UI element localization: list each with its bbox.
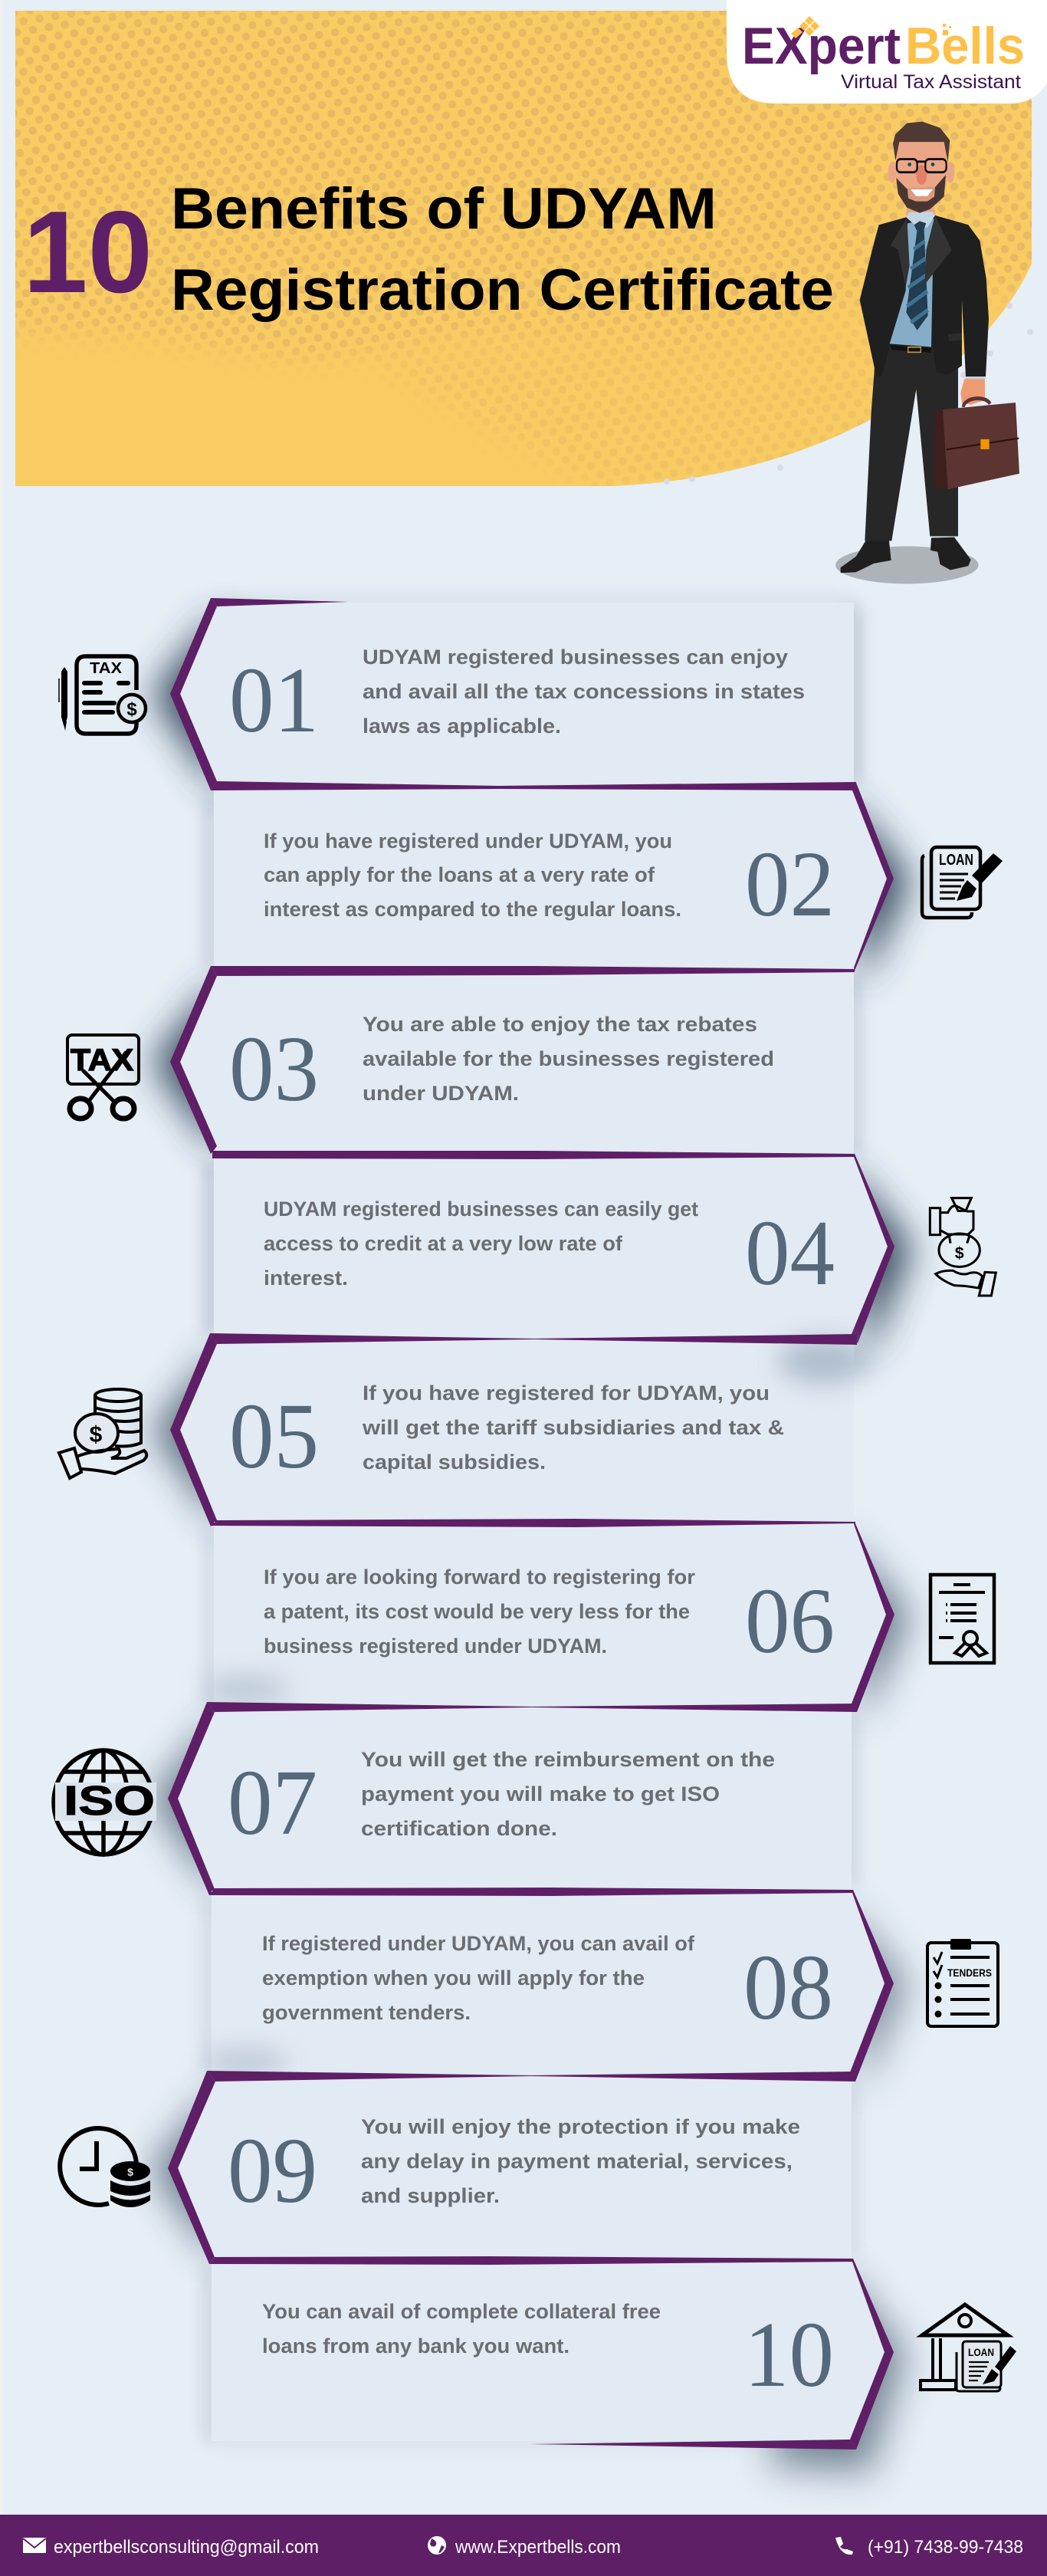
number: 07 [228, 1751, 317, 1855]
title number 10: 10 [23, 187, 153, 317]
band above card [209, 1888, 853, 1896]
icon: phone [835, 2537, 853, 2555]
body text [262, 2300, 661, 2358]
icon: clock and coins: $ [127, 2166, 133, 2178]
icon: tax with scissors [67, 1035, 139, 1119]
card frame [170, 598, 217, 790]
top wedge [211, 598, 348, 606]
body text: payment you will make to get ISO [361, 1783, 720, 1806]
icon: hand holding coin stack [59, 1389, 146, 1478]
band above card [209, 2256, 853, 2265]
left edge strip [0, 0, 2, 2515]
card arrow frame [850, 2259, 894, 2450]
body text: exemption when you will apply for the [262, 1967, 645, 1990]
icon: tax with scissors: TAX [71, 1043, 133, 1077]
card arrow frame [850, 1890, 894, 2082]
number: 09 [228, 2119, 317, 2223]
body text: will get the tariff subsidiaries and tax & [362, 1416, 784, 1439]
card arrow frame [852, 783, 894, 971]
panel: benefit 10 [209, 2256, 1016, 2450]
panel: benefit 08 [203, 1888, 998, 2082]
icon: envelope [23, 2538, 46, 2553]
logo plate [727, 0, 1047, 104]
number: 06 [745, 1569, 835, 1673]
number: 10 [744, 2303, 834, 2407]
body text: If you are looking forward to registering for [264, 1566, 695, 1589]
body text [363, 646, 805, 738]
number: 01 [229, 649, 319, 752]
body text: can apply for the loans at a very rate of [264, 863, 655, 886]
panel: benefit 06 [203, 1519, 994, 1712]
icon: hand holding coin stack: $ [90, 1422, 103, 1447]
band above card [212, 1151, 855, 1159]
body text: If registered under UDYAM, you can avail of [262, 1932, 695, 1955]
chevron drop shadows [149, 598, 912, 2472]
logo wordmark Bells: Bells [905, 17, 1025, 75]
body text: and supplier. [361, 2184, 500, 2207]
logo tiles [791, 16, 951, 38]
body text: capital subsidies. [363, 1451, 546, 1474]
body text [361, 1748, 775, 1840]
number: 02 [745, 833, 835, 936]
logo tagline: Virtual Tax Assistant [841, 71, 1021, 93]
icon: certificate [930, 1575, 994, 1663]
panel: benefit 07 [54, 1702, 857, 1895]
icon: tax document with coin [59, 656, 146, 734]
soft shadow on panel [203, 1675, 287, 1706]
soft shadow on panel [203, 2049, 287, 2076]
card frame [168, 2071, 215, 2264]
icon: tax document with coin: $ [126, 699, 137, 720]
icon: hands with money bag: $ [955, 1244, 964, 1263]
body text: certification done. [361, 1817, 557, 1840]
body text: You can avail of complete collateral free [262, 2300, 661, 2323]
body text: any delay in payment material, services, [361, 2150, 793, 2173]
body text [362, 1382, 784, 1474]
body text: If you have registered for UDYAM, you [363, 1382, 770, 1405]
bottom wedge [530, 2440, 856, 2450]
icon: globe [428, 2536, 446, 2555]
icon: hands with money bag [930, 1198, 996, 1296]
footer website: www.Expertbells.com [455, 2537, 621, 2558]
panel: benefit 05 [59, 1333, 870, 1526]
icon: loan document and pen [922, 847, 1003, 918]
body text [264, 1198, 698, 1290]
body text [264, 830, 681, 921]
panel: benefit 02 [211, 781, 1003, 971]
body text: government tenders. [262, 2001, 471, 2024]
body text: If you have registered under UDYAM, you [264, 830, 672, 853]
number: 08 [743, 1936, 833, 2039]
band above card [207, 2071, 855, 2082]
businessman illustration [835, 122, 1019, 583]
icon: bank with loan document [921, 2305, 1016, 2391]
body text: loans from any bank you want. [262, 2334, 569, 2358]
panel: benefit 09 [60, 2071, 855, 2264]
body text: You will get the reimbursement on the [361, 1748, 775, 1771]
number: 05 [229, 1385, 319, 1488]
footer phone: (+91) 7438-99-7438 [868, 2537, 1023, 2558]
body text: under UDYAM. [363, 1082, 519, 1105]
icon: loan document and pen: LOAN [939, 852, 973, 869]
body text: UDYAM registered businesses can enjoy [363, 646, 788, 669]
icon: tenders checklist [927, 1939, 998, 2026]
icon: clock and coins [60, 2128, 150, 2207]
number: 03 [229, 1017, 319, 1121]
body text: interest. [264, 1267, 348, 1290]
icon: ISO globe: ISO [64, 1778, 155, 1824]
card arrow frame [852, 1522, 894, 1712]
band above card [211, 1519, 855, 1527]
header yellow banner [0, 0, 1047, 491]
icon: ISO globe [54, 1750, 156, 1855]
body text [264, 1566, 695, 1658]
body text [262, 1932, 695, 2024]
band above card [207, 1702, 857, 1712]
icon: bank with loan document: LOAN [968, 2346, 994, 2358]
logo wordmark Expert: EXpert [742, 17, 901, 75]
body text: access to credit at a very low rate of [264, 1232, 623, 1255]
body text: UDYAM registered businesses can easily get [264, 1198, 698, 1221]
body text: and avail all the tax concessions in states [363, 680, 805, 703]
soft shadow on panel [778, 1338, 870, 1384]
band above card [210, 1333, 857, 1345]
card frame [168, 1702, 215, 1895]
icon: tax document with coin: TAX [90, 660, 123, 677]
panel: benefit 04 [212, 1151, 996, 1343]
band above card [211, 781, 856, 790]
title line 2: Registration Certificate [171, 258, 834, 323]
card arrow frame [852, 1154, 894, 1343]
body text: a patent, its cost would be very less for the [264, 1600, 690, 1623]
panel: benefit 01 [59, 598, 854, 790]
panel: benefit 03 [67, 966, 855, 1154]
icon: tenders checklist: TENDERS [947, 1967, 992, 1979]
body text: interest as compared to the regular loans. [264, 898, 681, 921]
card frame [170, 966, 217, 1154]
number: 04 [745, 1201, 835, 1305]
body text: You are able to enjoy the tax rebates [363, 1013, 757, 1036]
band above card [211, 966, 855, 976]
body text: laws as applicable. [363, 715, 561, 738]
card frame [170, 1333, 217, 1526]
footer email: expertbellsconsulting@gmail.com [54, 2537, 319, 2558]
body text: business registered under UDYAM. [264, 1635, 607, 1658]
body text [361, 2115, 800, 2207]
body text [363, 1013, 774, 1105]
body text: You will enjoy the protection if you make [361, 2115, 800, 2138]
footer bar [0, 2515, 1047, 2576]
title line 1: Benefits of UDYAM [171, 176, 717, 242]
body text: available for the businesses registered [363, 1047, 774, 1070]
